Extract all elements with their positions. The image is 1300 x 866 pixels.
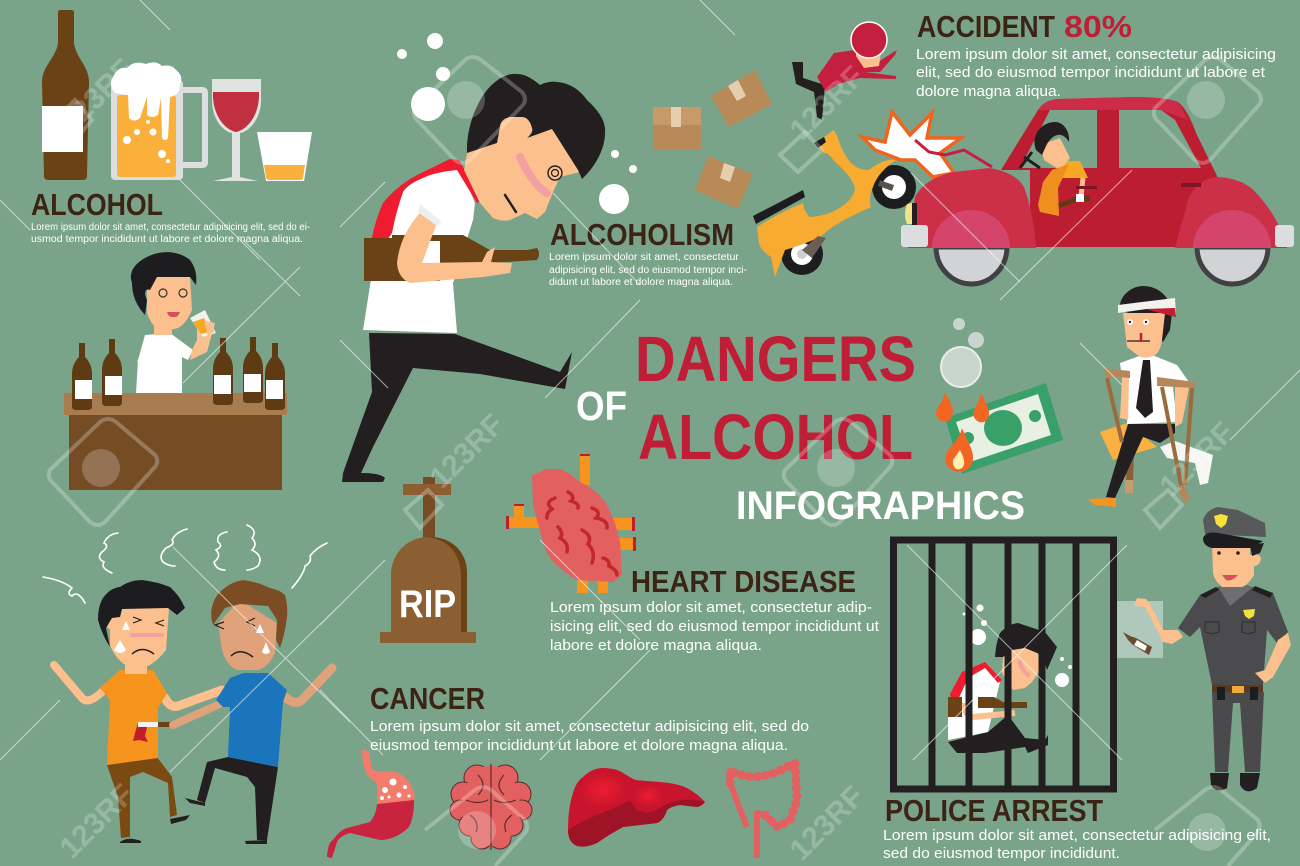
text: alcohol description: Lorem ipsum dolor sit amet, consectetur adipisicing elit, sed do ei- [31, 222, 310, 233]
illustration: police officer [1117, 507, 1291, 791]
text: cancer description: Lorem ipsum dolor sit amet, consectetur adipisicing elit, sed do [370, 719, 809, 735]
text: 123RF [1154, 416, 1241, 503]
icon: grave stone [380, 477, 476, 643]
icon: crash explosion [862, 112, 961, 177]
heading: alcoholism: ALCOHOLISM [550, 217, 734, 252]
text: heart disease description: isicing elit, sed do eiusmod tempor incididunt ut [550, 619, 879, 635]
belt [1212, 685, 1263, 700]
shirt and tie [1120, 355, 1189, 424]
icon: brown bottle [42, 10, 89, 180]
car fenders [908, 168, 1036, 248]
shirt [1178, 587, 1288, 685]
text: alcohol description: usmod tempor incididunt ut labore et dolore magna aliqua. [31, 234, 303, 245]
icon: liver [568, 768, 705, 847]
text: alcohol description [31, 222, 310, 245]
red sash [372, 159, 482, 253]
heading: heart disease: HEART DISEASE [631, 564, 856, 599]
left arm [1134, 598, 1183, 644]
text: accident description [916, 47, 1276, 100]
bar counter [64, 393, 287, 490]
text: accident description: Lorem ipsum dolor sit amet, consectetur adipisicing [916, 47, 1276, 63]
title: dangers of alcohol infographics: OF [576, 383, 627, 429]
text: cancer description [370, 719, 809, 754]
torso [363, 162, 475, 333]
text: police arrest description [883, 828, 1271, 862]
icon: grave stone: RIP [399, 583, 456, 626]
head [1120, 286, 1172, 342]
text: cancer description: eiusmod tempor incididunt ut labore et dolore magna aliqua. [370, 738, 788, 754]
title: dangers of alcohol infographics: DANGERS [635, 323, 916, 395]
icon: burning banknote and bubbles [936, 318, 1063, 474]
illustration: two men fighting [43, 525, 332, 844]
arm [397, 213, 512, 283]
angry scribbles [43, 525, 327, 603]
heading: accident 80%: 80% [1064, 9, 1132, 44]
title: dangers of alcohol infographics [576, 323, 1025, 528]
car windows [1020, 110, 1201, 168]
text: heart disease description: labore et dolore magna aliqua. [550, 638, 762, 654]
icon: stomach [327, 750, 415, 858]
title: dangers of alcohol infographics: ALCOHOL [638, 401, 913, 473]
icon: flying boxes [653, 70, 772, 209]
icon: alcohol drinks [42, 10, 312, 181]
heading: cancer: CANCER [370, 681, 485, 716]
car bumpers and headlight [901, 203, 1294, 247]
legs [342, 333, 572, 482]
text: 123RF [424, 408, 511, 495]
icon: wine glass [212, 79, 261, 181]
text: accident description: dolore magna aliqua. [916, 84, 1061, 100]
jail bars [894, 540, 1114, 789]
face [464, 110, 580, 221]
title: dangers of alcohol infographics: INFOGRAPHICS [736, 484, 1025, 528]
car driver [1020, 122, 1090, 216]
decorative bubbles [397, 33, 637, 214]
heading: alcohol: ALCOHOL [31, 187, 163, 222]
illustration: red car [901, 97, 1294, 284]
illustration: yellow scooter [753, 130, 916, 277]
text: 123RF [784, 780, 871, 866]
text: police arrest description: sed do eiusmod tempor incididunt. [883, 846, 1120, 862]
prisoner [948, 604, 1072, 753]
text: alcoholism description [549, 252, 747, 288]
illustration: motorbike rider thrown [792, 22, 897, 120]
text: heart disease description [550, 600, 879, 654]
illustration: man drinking at bar [64, 252, 287, 490]
car wheels [936, 247, 1268, 284]
man in blue shirt [173, 580, 332, 844]
bartender [131, 252, 216, 393]
text: police arrest description: Lorem ipsum dolor sit amet, consectetur adipisicing elit, [883, 828, 1271, 844]
text: heart disease description: Lorem ipsum dolor sit amet, consectetur adip- [550, 600, 872, 616]
evidence bag [1117, 601, 1163, 658]
text: 123RF [54, 53, 141, 140]
bottle [364, 235, 539, 281]
car cabin [1001, 97, 1219, 247]
head [1212, 543, 1261, 587]
crutches [1107, 378, 1192, 490]
icon: heart [506, 454, 636, 593]
hair [467, 74, 605, 179]
icon: intestine [730, 763, 797, 858]
icon: whisky glass [257, 132, 312, 181]
illustration: injured man on crutches [1087, 286, 1213, 507]
police cap [1203, 507, 1266, 548]
text: accident description: elit, sed do eiusmod tempor incididunt ut labore et [916, 65, 1265, 81]
heading: police arrest: POLICE ARREST [885, 793, 1103, 828]
man in orange shirt [54, 580, 222, 843]
illustration: jail cell with prisoner [894, 540, 1114, 789]
trousers [1106, 424, 1175, 498]
text: alcoholism description: adipisicing elit, sed do eiusmod tempor inci- [549, 265, 747, 276]
icon: brain [450, 764, 532, 850]
heading: accident 80%: ACCIDENT [917, 9, 1055, 44]
bottles [72, 337, 285, 410]
illustration: drunk man kicking with bottle [342, 74, 605, 482]
text: 123RF [784, 60, 871, 147]
bandaged leg [1160, 441, 1213, 485]
icon: beer mug [111, 62, 208, 180]
text: alcoholism description: Lorem ipsum dolor sit amet, consectetur [549, 252, 740, 263]
folder and chair [1100, 423, 1157, 493]
trousers and shoes [1212, 692, 1264, 772]
text: 123RF [54, 778, 141, 865]
text: alcoholism description: didunt ut labore et dolore magna aliqua. [549, 277, 733, 288]
